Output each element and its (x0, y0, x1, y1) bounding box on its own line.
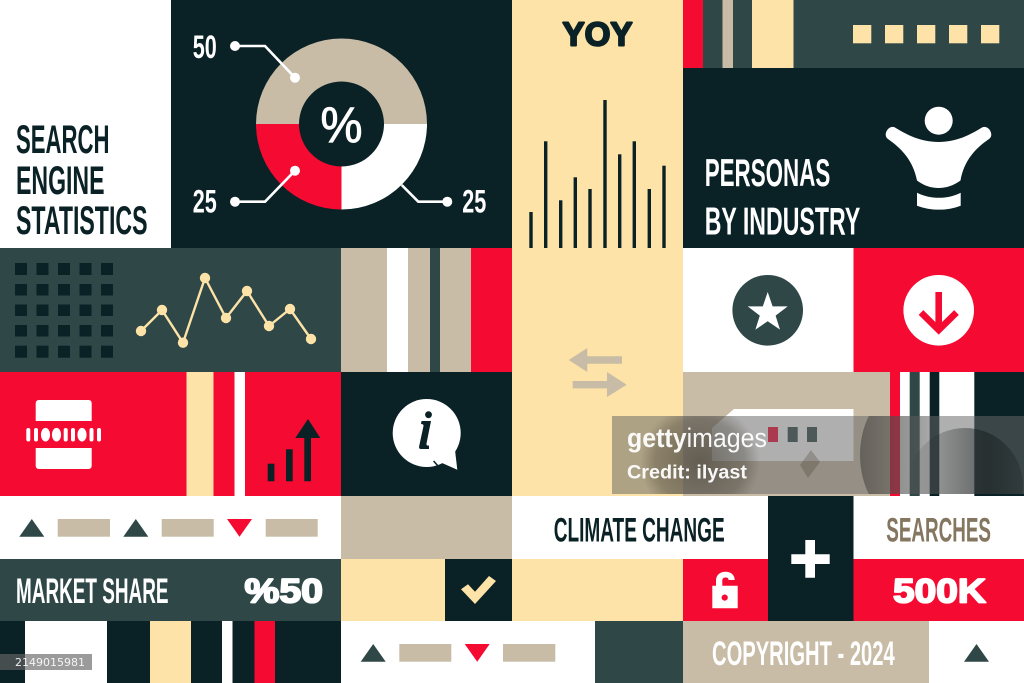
watermark: image id (0, 654, 92, 670)
panel: plus (768, 496, 854, 621)
square row (853, 25, 999, 43)
panel: 500K (854, 559, 1024, 621)
panel: cream column (512, 0, 683, 496)
icon: down arrow badge (903, 275, 974, 346)
label: copyright: COPYRIGHT - 2024 (712, 635, 895, 673)
label: market share: MARKET SHARE (16, 572, 168, 611)
watermark: getty images (612, 416, 1024, 494)
panel: climate change (512, 496, 768, 559)
icon: open padlock (712, 572, 738, 608)
status squares (768, 427, 817, 442)
panel: bottom stripes (0, 621, 341, 683)
callout: 50 (193, 29, 300, 83)
panel: market share (0, 559, 341, 621)
panel: trend row bottom (341, 621, 595, 683)
title: search engine statistics: STATISTICS (16, 199, 148, 243)
value: %50: %50 (244, 572, 323, 610)
callout: 25 right (402, 184, 486, 220)
callout: 25 left: 25 (193, 184, 217, 220)
beige block (341, 496, 512, 559)
icon: rising bars with arrow (268, 419, 320, 481)
watermark: image id: 2149015981 (15, 656, 85, 669)
cream block (512, 559, 683, 621)
line chart (136, 273, 316, 348)
panel: lock (683, 559, 768, 621)
dot grid (15, 263, 113, 358)
icon: star badge (732, 275, 803, 346)
panel: searches (854, 496, 1024, 559)
heading: YOY: YOY (562, 16, 632, 52)
panel: corner triangle (929, 621, 1024, 683)
callout: 50: 50 (193, 29, 217, 65)
bar chart (529, 100, 666, 248)
cream block (341, 559, 445, 621)
panel: red with icon and growth chart (0, 372, 341, 496)
panel: stripes right (890, 372, 1024, 496)
panel: beige stripes (341, 248, 512, 372)
value: 500K: 500K (893, 572, 987, 610)
panel: title (0, 0, 171, 248)
icon: info speech bubble (393, 399, 461, 470)
panel: beige with bar (683, 372, 890, 496)
title: search engine statistics (16, 118, 148, 243)
panel: info (341, 372, 512, 496)
label: climate change: CLIMATE CHANGE (554, 512, 725, 550)
percent sign: % (320, 97, 362, 153)
panel: donut chart (171, 0, 512, 248)
panel: personas (683, 68, 1024, 248)
watermark: getty images: gettyimages (627, 423, 767, 453)
icon: server (26, 400, 101, 469)
callout: 25 right: 25 (462, 184, 486, 220)
panel: check (445, 559, 512, 621)
title: search engine statistics: ENGINE (16, 159, 104, 203)
heading: personas by industry: PERSONAS (705, 152, 830, 195)
heading: personas by industry (705, 152, 860, 243)
icon: person with raised arms (886, 107, 991, 210)
panel: trend row (0, 496, 341, 559)
icon: exchange arrows (569, 348, 627, 397)
callout: 25 left (193, 166, 300, 220)
heading: personas by industry: BY INDUSTRY (705, 200, 860, 243)
panel: copyright (683, 621, 929, 683)
slate block (595, 621, 683, 683)
panel: download (854, 248, 1024, 372)
panel: star (683, 248, 854, 372)
title: search engine statistics: SEARCH (16, 118, 110, 162)
donut chart (256, 38, 427, 209)
panel: top right stripes (683, 0, 1024, 68)
panel: dot grid and line chart (0, 248, 341, 372)
watermark: getty images: Credit: ilyast (627, 462, 748, 484)
